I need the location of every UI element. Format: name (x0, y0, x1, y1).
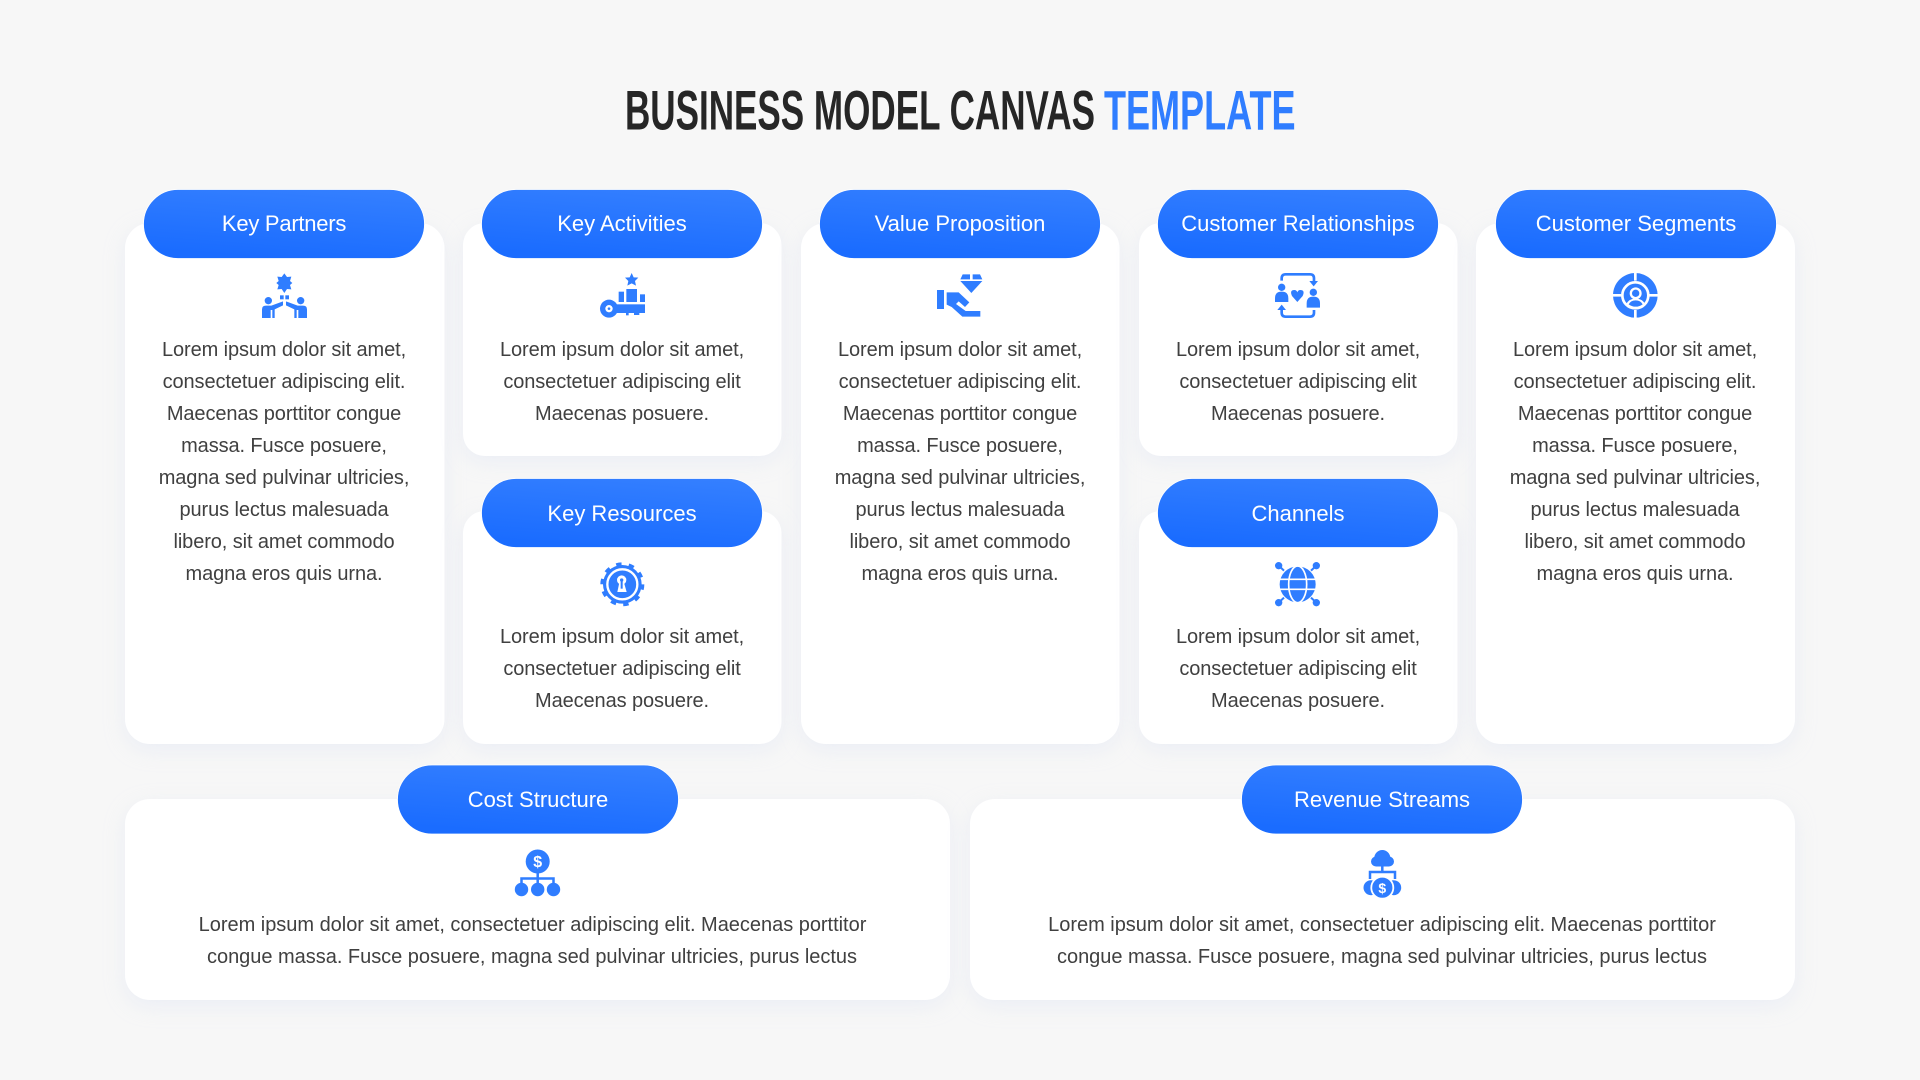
channels text: Lorem ipsum dolor sit amet, (1176, 626, 1420, 648)
cost structure heading (398, 765, 678, 834)
customer segments text: consectetuer adipiscing elit. (1514, 371, 1756, 393)
customer segments text: Maecenas porttitor congue (1518, 403, 1752, 425)
icon: customer relationships (1275, 274, 1320, 317)
panel: cost structure (125, 765, 950, 1000)
key resources heading: Key Resources (547, 501, 697, 526)
key activities heading (482, 190, 762, 258)
value proposition heading: Value Proposition (875, 211, 1045, 236)
channels text: Maecenas posuere. (1211, 690, 1385, 712)
customer segments heading (1496, 190, 1776, 258)
customer relationships text: Maecenas posuere. (1211, 403, 1385, 425)
icon: key activities (600, 273, 645, 318)
channels heading: Channels (1252, 501, 1344, 526)
key partners text: Lorem ipsum dolor sit amet, (162, 339, 406, 361)
key partners text: Maecenas porttitor congue (167, 403, 401, 425)
key resources text: consectetuer adipiscing elit (503, 658, 741, 680)
key activities heading: Key Activities (557, 211, 687, 236)
customer relationships heading (1158, 190, 1438, 258)
value proposition text: libero, sit amet commodo (849, 531, 1071, 553)
customer segments text: massa. Fusce posuere, (1532, 435, 1738, 457)
icon: key partners (262, 273, 307, 318)
panel: key activities (463, 190, 782, 456)
key partners text: massa. Fusce posuere, (181, 435, 387, 457)
value proposition text: magna sed pulvinar ultricies, (835, 467, 1085, 489)
customer segments heading: Customer Segments (1536, 211, 1736, 236)
revenue streams text: Lorem ipsum dolor sit amet, consectetuer adipiscing elit. Maecenas porttitor (1048, 914, 1716, 936)
icon: channels (1275, 562, 1320, 606)
revenue streams heading: Revenue Streams (1294, 787, 1470, 812)
icon: cost structure (515, 850, 560, 896)
value proposition text: Lorem ipsum dolor sit amet, (838, 339, 1082, 361)
icon: revenue streams (1364, 850, 1401, 899)
panel: customer relationships (1139, 190, 1458, 456)
customer relationships text: consectetuer adipiscing elit (1179, 371, 1417, 393)
panel: customer segments (1476, 190, 1795, 744)
key partners text: magna eros quis urna. (186, 563, 382, 585)
key resources text: Maecenas posuere. (535, 690, 709, 712)
icon: value proposition (937, 274, 982, 317)
title: TEMPLATE (1104, 78, 1296, 142)
panel: value proposition (801, 190, 1120, 744)
key partners heading (144, 190, 424, 258)
key resources heading (482, 478, 762, 548)
revenue streams text: congue massa. Fusce posuere, magna sed pulvinar ultricies, purus lectus (1057, 946, 1707, 968)
value proposition text: purus lectus malesuada (855, 499, 1065, 521)
icon: customer segments (1613, 273, 1658, 318)
icon: revenue streams: $ (1378, 880, 1386, 896)
value proposition text: Maecenas porttitor congue (843, 403, 1077, 425)
customer segments text: Lorem ipsum dolor sit amet, (1513, 339, 1757, 361)
cost structure text: congue massa. Fusce posuere, magna sed pulvinar ultricies, purus lectus (207, 946, 857, 968)
panel: key resources (463, 478, 782, 744)
panel: revenue streams (970, 765, 1795, 1000)
key resources text: Lorem ipsum dolor sit amet, (500, 626, 744, 648)
cost structure heading: Cost Structure (468, 787, 608, 812)
value proposition text: massa. Fusce posuere, (857, 435, 1063, 457)
customer segments text: libero, sit amet commodo (1524, 531, 1746, 553)
value proposition heading (820, 190, 1100, 258)
key activities text: Lorem ipsum dolor sit amet, (500, 339, 744, 361)
key partners text: consectetuer adipiscing elit. (163, 371, 405, 393)
customer relationships heading: Customer Relationships (1181, 211, 1415, 236)
channels text: consectetuer adipiscing elit (1179, 658, 1417, 680)
key partners text: purus lectus malesuada (179, 499, 389, 521)
customer segments text: magna sed pulvinar ultricies, (1510, 467, 1760, 489)
cost structure text: Lorem ipsum dolor sit amet, consectetuer adipiscing elit. Maecenas porttitor (199, 914, 867, 936)
customer relationships text: Lorem ipsum dolor sit amet, (1176, 339, 1420, 361)
panel: channels (1139, 478, 1458, 744)
key partners text: libero, sit amet commodo (173, 531, 395, 553)
key activities text: Maecenas posuere. (535, 403, 709, 425)
icon: cost structure: $ (533, 854, 542, 871)
revenue streams heading (1242, 765, 1522, 834)
title: BUSINESS MODEL CANVAS (625, 78, 1095, 142)
panel: key partners (125, 190, 444, 744)
key partners text: magna sed pulvinar ultricies, (159, 467, 409, 489)
icon: key resources (602, 564, 642, 604)
key partners heading: Key Partners (222, 211, 346, 236)
channels heading (1158, 478, 1438, 548)
customer segments text: purus lectus malesuada (1530, 499, 1740, 521)
value proposition text: magna eros quis urna. (862, 563, 1058, 585)
key activities text: consectetuer adipiscing elit (503, 371, 741, 393)
customer segments text: magna eros quis urna. (1537, 563, 1733, 585)
value proposition text: consectetuer adipiscing elit. (839, 371, 1081, 393)
